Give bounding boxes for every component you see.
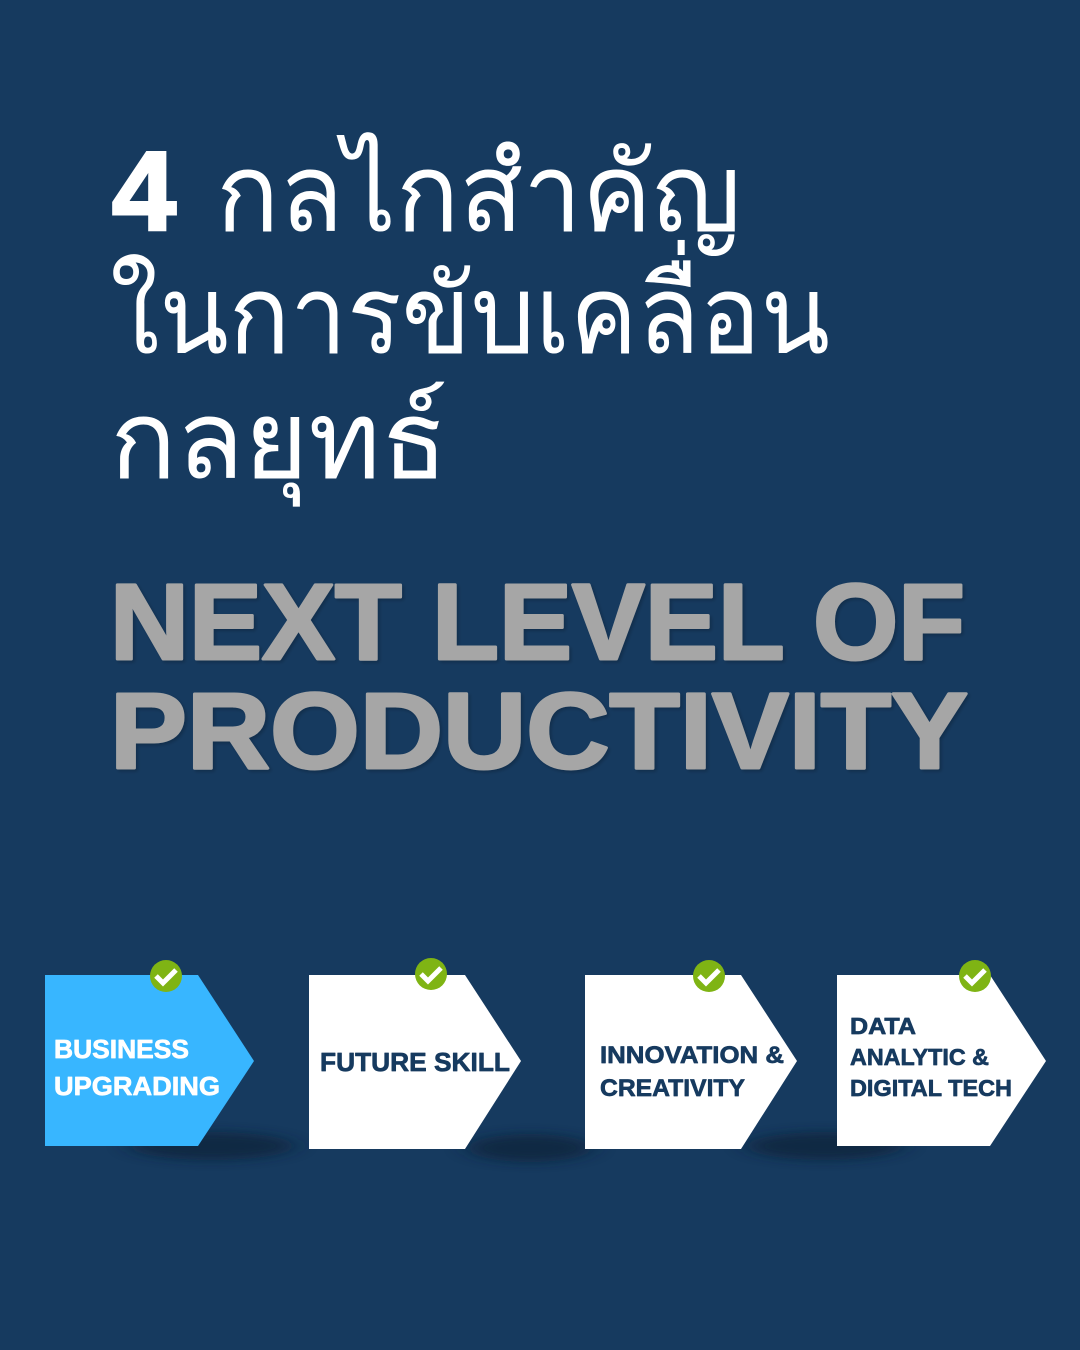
arrow card: business upgrading: UPGRADING: [54, 1071, 220, 1101]
arrow card: innovation and creativity: CREATIVITY: [600, 1075, 745, 1102]
subtitle: next level of productivity: PRODUCTIVITY: [110, 670, 968, 791]
icon: check badge: [150, 960, 182, 992]
subtitle: next level of productivity: [110, 561, 968, 791]
arrow card: innovation and creativity: [585, 960, 797, 1149]
heading line 1: 4: [112, 129, 176, 254]
arrow card: data analytic and digital tech: DATA: [850, 1013, 916, 1039]
heading line 3: กลยุทธ์: [110, 379, 448, 507]
arrow card: business upgrading: BUSINESS: [54, 1034, 189, 1064]
shadows under arrows: [130, 1132, 903, 1162]
arrow card: innovation and creativity: INNOVATION &: [600, 1042, 784, 1069]
arrow card: data analytic and digital tech: [837, 960, 1046, 1146]
arrow card: business upgrading: [45, 960, 254, 1146]
icon: check badge: [959, 960, 991, 992]
arrow card: future skill: [309, 958, 521, 1149]
heading line 1: กลไกสำคัญ: [216, 132, 741, 257]
icon: check badge: [693, 960, 725, 992]
arrow card: data analytic and digital tech: ANALYTIC &: [850, 1044, 989, 1070]
title: Thai heading: [110, 129, 830, 507]
arrow card: future skill: FUTURE SKILL: [320, 1047, 510, 1077]
subtitle: next level of productivity: NEXT LEVEL OF: [110, 561, 965, 682]
arrow card: data analytic and digital tech: DIGITAL TECH: [850, 1075, 1012, 1101]
icon: check badge: [415, 958, 447, 990]
heading line 2: ในการขับเคลื่อน: [110, 239, 830, 377]
